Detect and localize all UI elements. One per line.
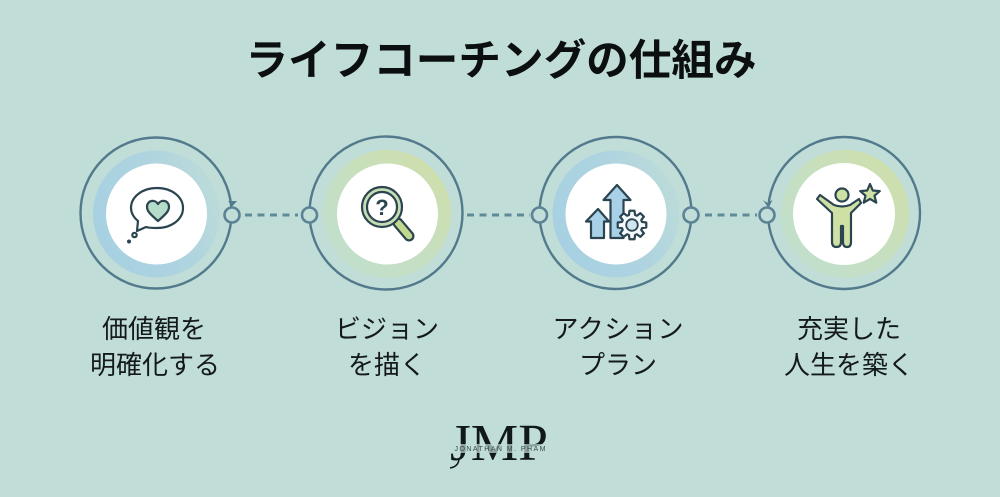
step 3 outer ring (540, 137, 692, 289)
icon: magnifying glass with question mark (362, 187, 409, 236)
icon: magnifying glass with question mark: ? (375, 195, 389, 220)
step 4: build a fulfilling life (760, 137, 920, 289)
step 1 arrowhead (228, 201, 237, 206)
icon: person reaching for star (817, 184, 880, 247)
step 3 label (552, 314, 684, 380)
step 4 label (784, 314, 914, 380)
step 2 color band (323, 150, 451, 278)
step 2 node (302, 208, 317, 222)
step 4 outer ring (768, 137, 920, 289)
step 1 outer ring (80, 138, 232, 288)
step 3 left node (532, 208, 547, 222)
connector: step 3 to step 4 (705, 214, 757, 216)
connector: step 2 to step 3 (467, 214, 530, 216)
step 1 white disc (106, 164, 207, 264)
step 2 label: を描く (348, 350, 426, 380)
step 3 label: プラン (579, 350, 657, 380)
step 3 white disc (566, 164, 666, 264)
step 3 color band (552, 150, 680, 278)
step 3 right node (684, 208, 698, 222)
step 2 outer ring (310, 136, 462, 290)
step 4 label: 人生を築く (784, 350, 914, 380)
step 4 color band (781, 150, 909, 278)
step 4 node (760, 208, 774, 222)
logo: JMP: JMP (450, 415, 548, 472)
step 3 label: アクション (552, 314, 684, 344)
step 1 node (224, 208, 240, 222)
step 4 white disc (793, 163, 895, 265)
logo: JMP: JONATHAN M. PHAM (454, 446, 546, 453)
icon: speech bubble with heart (127, 188, 183, 244)
step 1 label: 価値観を (102, 314, 206, 344)
step 1 label: 明確化する (90, 350, 220, 380)
title: ライフコーチングの仕組み (245, 37, 757, 85)
step 4 label: 充実した (797, 314, 901, 344)
step 3: action plan (532, 137, 698, 289)
step 4 arrowhead (763, 200, 772, 208)
step 1 color band (93, 150, 220, 278)
icon: arrows and gear (586, 185, 646, 239)
step 1: clarify values (80, 138, 240, 288)
step 2: draw a vision (302, 136, 462, 290)
step 2 white disc (337, 164, 438, 264)
connector: step 1 to step 2 (245, 214, 298, 216)
step 2 label (335, 314, 439, 380)
step 2 label: ビジョン (335, 314, 439, 344)
step 1 label (90, 314, 220, 380)
